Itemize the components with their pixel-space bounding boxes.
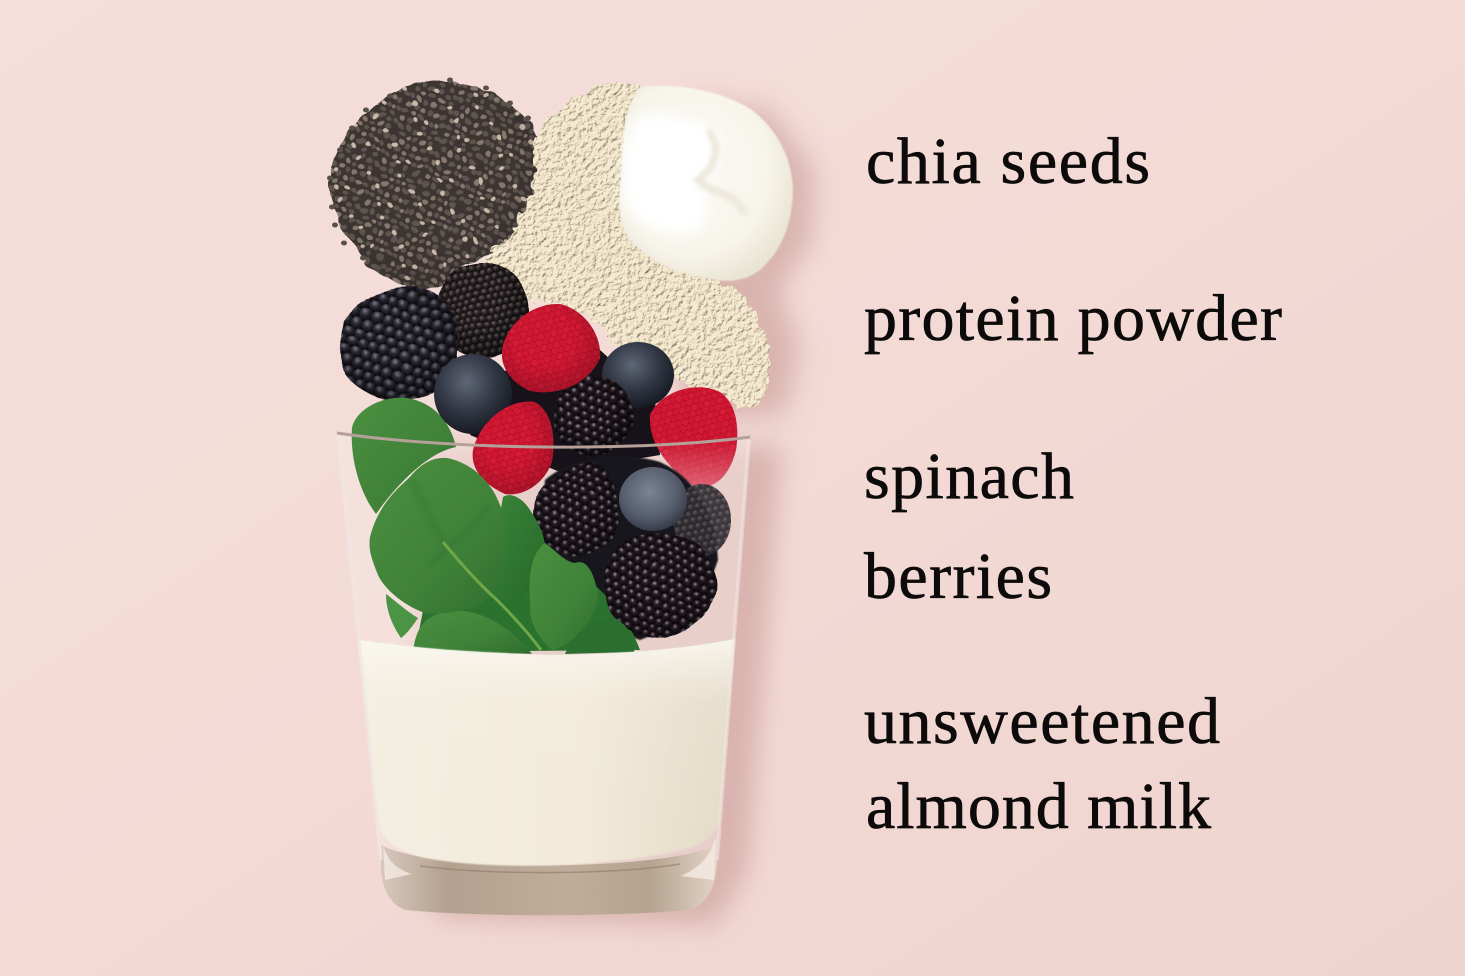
spinach leaf behind, top left [352,398,456,514]
raspberry middle [473,402,554,494]
label: spinach: spinach [864,440,1074,513]
right spinach leaf [530,543,598,651]
label: unsweetened almond milk: almond milk [866,770,1211,843]
pile of chia seeds [327,78,543,290]
bottom spinach leaves [413,611,532,654]
main leaf stem [443,542,541,650]
raspberry top [502,304,600,392]
large blackberry in glass [604,533,716,638]
dollop of yogurt [619,86,793,281]
milk surface highlight [358,639,735,866]
green backing behind the spinach [415,557,640,652]
back blackberry [435,263,529,357]
glass base [381,845,717,915]
stray chia seeds [327,78,543,270]
small spinach leaf, lower left [386,594,418,638]
grey blackberry behind blueberry [673,484,731,556]
soft shadow of the ingredients and glass [420,100,815,925]
protein powder mound [480,82,771,408]
blackberry centre in glass [533,462,619,556]
dark spinach leaf, lower right [565,618,634,654]
main spinach leaf [369,458,507,614]
dark fill behind berries in glass [540,456,718,640]
label: protein powder: protein powder [864,282,1282,355]
raspberry right [650,387,737,487]
blueberry in glass [619,467,687,531]
spinach leaves in glass [369,458,634,654]
glass rim and highlights [337,433,750,873]
small blackberry centre [553,376,633,456]
blueberry right [602,342,674,408]
back spinach leaf, centre [490,495,545,600]
label: unsweetened almond milk [864,685,1220,843]
label: berries: berries [864,540,1052,613]
large blackberry [339,287,458,401]
milk [358,639,735,866]
glass tumbler body [337,433,750,915]
label: unsweetened almond milk: unsweetened [864,685,1220,758]
blueberry left [434,354,512,434]
dark gaps between upper berries [470,350,660,472]
label: chia seeds: chia seeds [866,125,1150,198]
